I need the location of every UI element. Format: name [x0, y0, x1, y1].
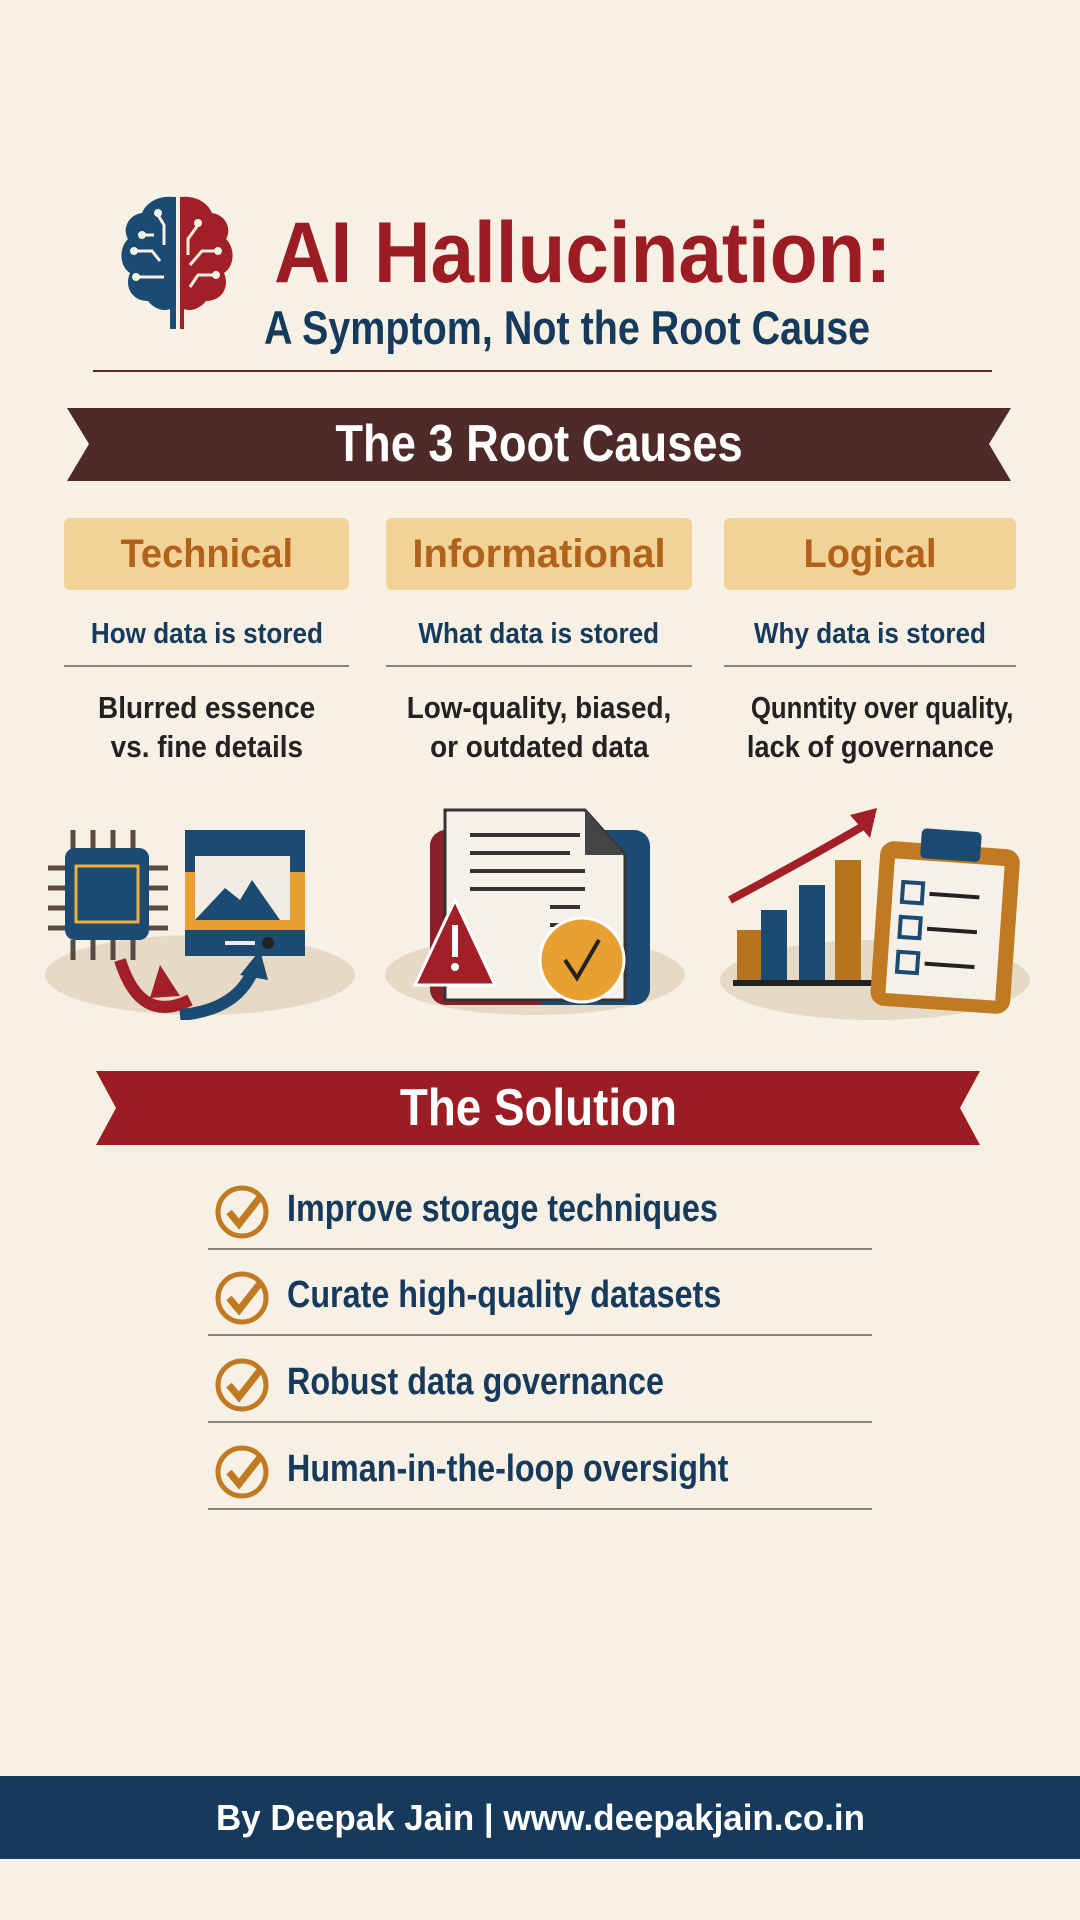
solution item 3: Robust data governance [287, 1361, 664, 1403]
banner: root causes: The 3 Root Causes [335, 415, 743, 473]
solution item 1 [208, 1186, 872, 1250]
panel: logical: Why data is stored [754, 618, 986, 650]
title: AI Hallucination: [274, 205, 891, 301]
panel: informational: Informational [412, 532, 666, 576]
panel: informational: Low-quality, biased, [407, 690, 671, 725]
panel: informational [386, 518, 692, 764]
solution item 4 [208, 1446, 872, 1510]
icon: document warning [385, 808, 685, 1015]
footer [0, 1776, 1080, 1859]
banner: solution: The Solution [399, 1079, 677, 1137]
banner: root causes [67, 408, 1011, 481]
panel: logical: lack of governance [746, 729, 994, 764]
solution item 3 [208, 1358, 872, 1423]
solution item 1: Improve storage techniques [287, 1188, 718, 1230]
panel: logical [724, 518, 1016, 764]
banner: solution [96, 1071, 980, 1145]
footer: By Deepak Jain | www.deepakjain.co.in [216, 1797, 864, 1838]
panel: informational: or outdated data [430, 729, 648, 764]
panel: technical: vs. fine details [110, 729, 303, 764]
panel: technical: Technical [120, 532, 293, 576]
icon: bar chart and clipboard [720, 808, 1030, 1020]
brain icon [121, 196, 233, 329]
panel: informational: What data is stored [419, 618, 659, 650]
panel: technical: Blurred essence [98, 690, 315, 725]
solution item 2 [208, 1272, 872, 1336]
solution item 2: Curate high-quality datasets [287, 1274, 721, 1316]
panel: logical: Qunntity over quality, [751, 690, 1013, 725]
panel: technical [64, 518, 349, 764]
icon: chip and image [45, 830, 355, 1020]
solution item 4: Human-in-the-loop oversight [287, 1448, 728, 1490]
panel: logical: Logical [803, 532, 937, 576]
subtitle: A Symptom, Not the Root Cause [264, 301, 870, 354]
panel: technical: How data is stored [90, 618, 323, 650]
